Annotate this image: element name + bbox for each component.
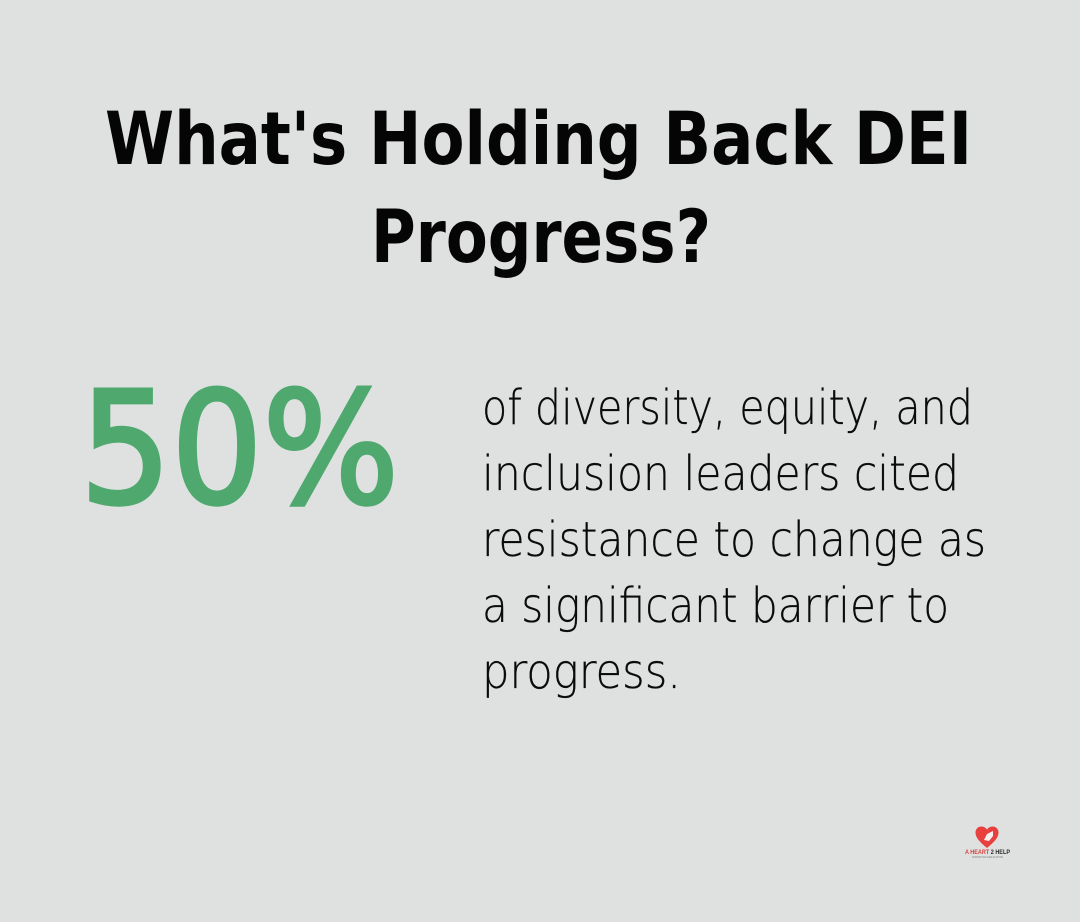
logo tagline: SUPPORT AND CARE IN ACTION [972, 856, 1003, 859]
logo: A Heart 2 Help [965, 826, 1011, 859]
title: Progress? [371, 195, 711, 280]
logo wordmark: A HEART 2 HELP [965, 849, 1011, 856]
description text: inclusion leaders cited [482, 446, 959, 502]
statistic: 50%: 50% [80, 358, 399, 540]
description text [482, 380, 986, 700]
icon: heart with hands [976, 826, 998, 848]
description text: progress. [482, 644, 681, 700]
description text: a significant barrier to [482, 578, 949, 634]
title [105, 97, 972, 280]
description text: of diversity, equity, and [482, 380, 973, 436]
description text: resistance to change as [482, 512, 986, 568]
